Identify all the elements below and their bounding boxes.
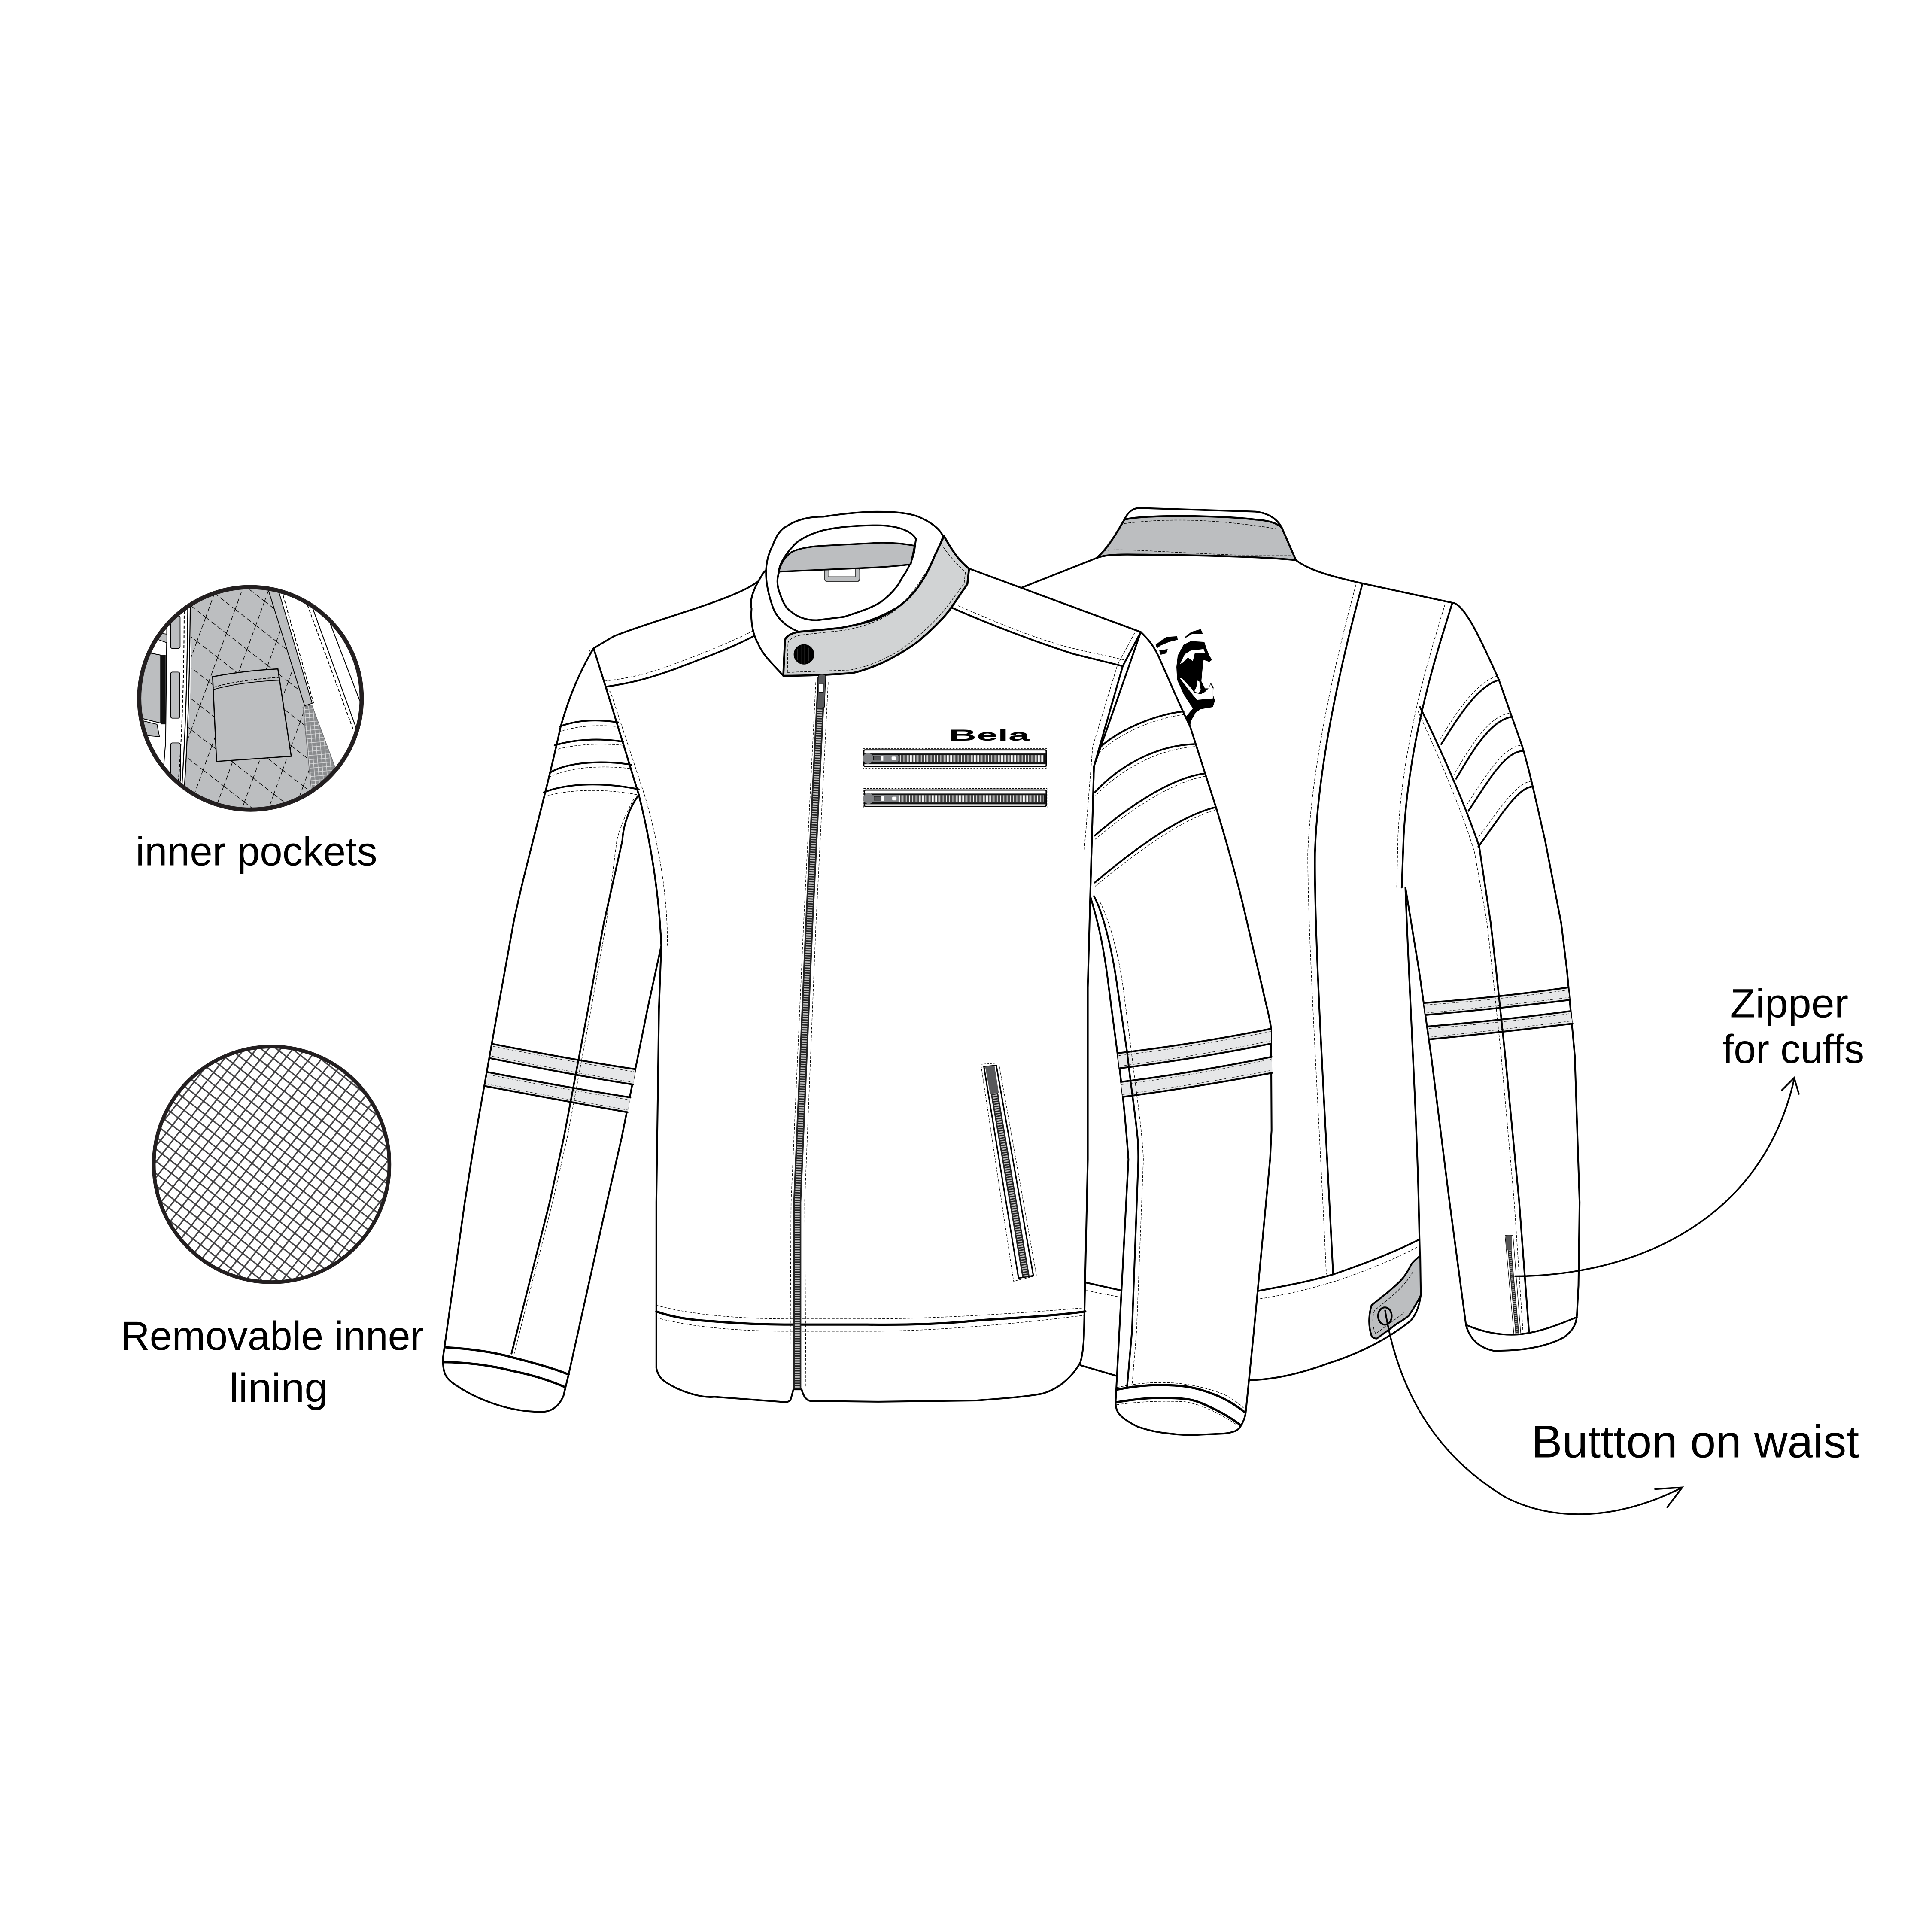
label: removable inner lining — [121, 1313, 424, 1411]
lion lower jaw highlight — [1180, 678, 1213, 700]
label: button on waist: Buttton on waist — [1531, 1416, 1859, 1467]
left sleeve inner seam — [511, 795, 639, 1354]
left sleeve — [443, 648, 661, 1412]
inside pocket — [213, 669, 291, 762]
lion stripes — [1156, 636, 1178, 648]
back sleeve reflective bands — [1424, 987, 1573, 1039]
label: zipper for cuffs: Zipper — [1730, 981, 1848, 1026]
back centre seams — [1308, 583, 1529, 1333]
collar — [751, 512, 969, 676]
zipper slider — [817, 674, 826, 707]
left sleeve upper stripes — [543, 720, 639, 797]
zip and seams on right — [268, 589, 360, 731]
label: zipper for cuffs: for cuffs — [1722, 1027, 1864, 1072]
torso body — [594, 568, 1141, 1402]
label: removable inner lining: lining — [229, 1365, 328, 1411]
chest zipper top — [863, 748, 1047, 768]
cuff on back sleeve — [1466, 1317, 1577, 1335]
jacket front view — [443, 512, 1272, 1435]
label: removable inner lining: Removable inner — [121, 1313, 424, 1359]
left collar stand — [751, 544, 841, 676]
torso hem seam — [656, 1305, 1085, 1331]
back collar stitching — [1104, 520, 1294, 555]
right yoke seam — [951, 607, 1123, 666]
detail circle: mesh lining — [154, 1047, 389, 1282]
right cuff — [1117, 1382, 1245, 1425]
left armhole stitch — [589, 650, 668, 945]
cuff zipper — [1505, 1236, 1521, 1334]
collar band stitching — [787, 543, 966, 672]
right sleeve — [1090, 632, 1272, 1435]
lion tooth — [1194, 680, 1201, 693]
quilted lining — [183, 581, 312, 816]
mesh panel — [303, 705, 335, 791]
back collar grey panel — [1097, 516, 1296, 560]
right sleeve outline — [1090, 632, 1272, 1435]
collar inner opening — [778, 526, 916, 620]
lion upper fang highlight — [1180, 649, 1205, 664]
detail circle: inner pockets — [136, 581, 361, 816]
centre front zipper — [790, 674, 828, 1388]
back jacket outline — [1020, 508, 1580, 1380]
arrow: zipper for cuffs — [1515, 1078, 1799, 1276]
arrow: button on waist — [1385, 1311, 1682, 1514]
grey collar band — [783, 536, 969, 676]
left placket panels — [141, 607, 191, 786]
lion logo — [1156, 629, 1215, 729]
jacket back view — [1020, 508, 1580, 1380]
brand logo: Bela — [949, 726, 1031, 744]
chest zipper bottom — [863, 789, 1047, 808]
back hem seam — [1086, 1239, 1419, 1300]
left sleeve outline — [443, 648, 661, 1412]
left sleeve reflective bands — [486, 1044, 635, 1112]
waist button tab — [1369, 1256, 1421, 1339]
right sleeve upper stripes — [1095, 711, 1216, 886]
hand pocket zipper — [981, 1063, 1036, 1281]
back sleeve chevrons — [1440, 676, 1533, 847]
armhole stitch right — [1084, 633, 1135, 1273]
left cuff — [443, 1347, 568, 1387]
inner collar grey panel — [779, 543, 915, 572]
left yoke seam — [606, 636, 754, 687]
neck label — [824, 567, 860, 582]
collar rim — [766, 512, 943, 632]
label: zipper for cuffs — [1722, 981, 1864, 1072]
right sleeve inner seam — [1094, 896, 1138, 1387]
label: inner pockets: inner pockets — [136, 829, 377, 874]
lion mouth silhouette — [1176, 641, 1215, 729]
snap button — [794, 644, 814, 665]
right sleeve reflective bands — [1118, 1029, 1272, 1097]
